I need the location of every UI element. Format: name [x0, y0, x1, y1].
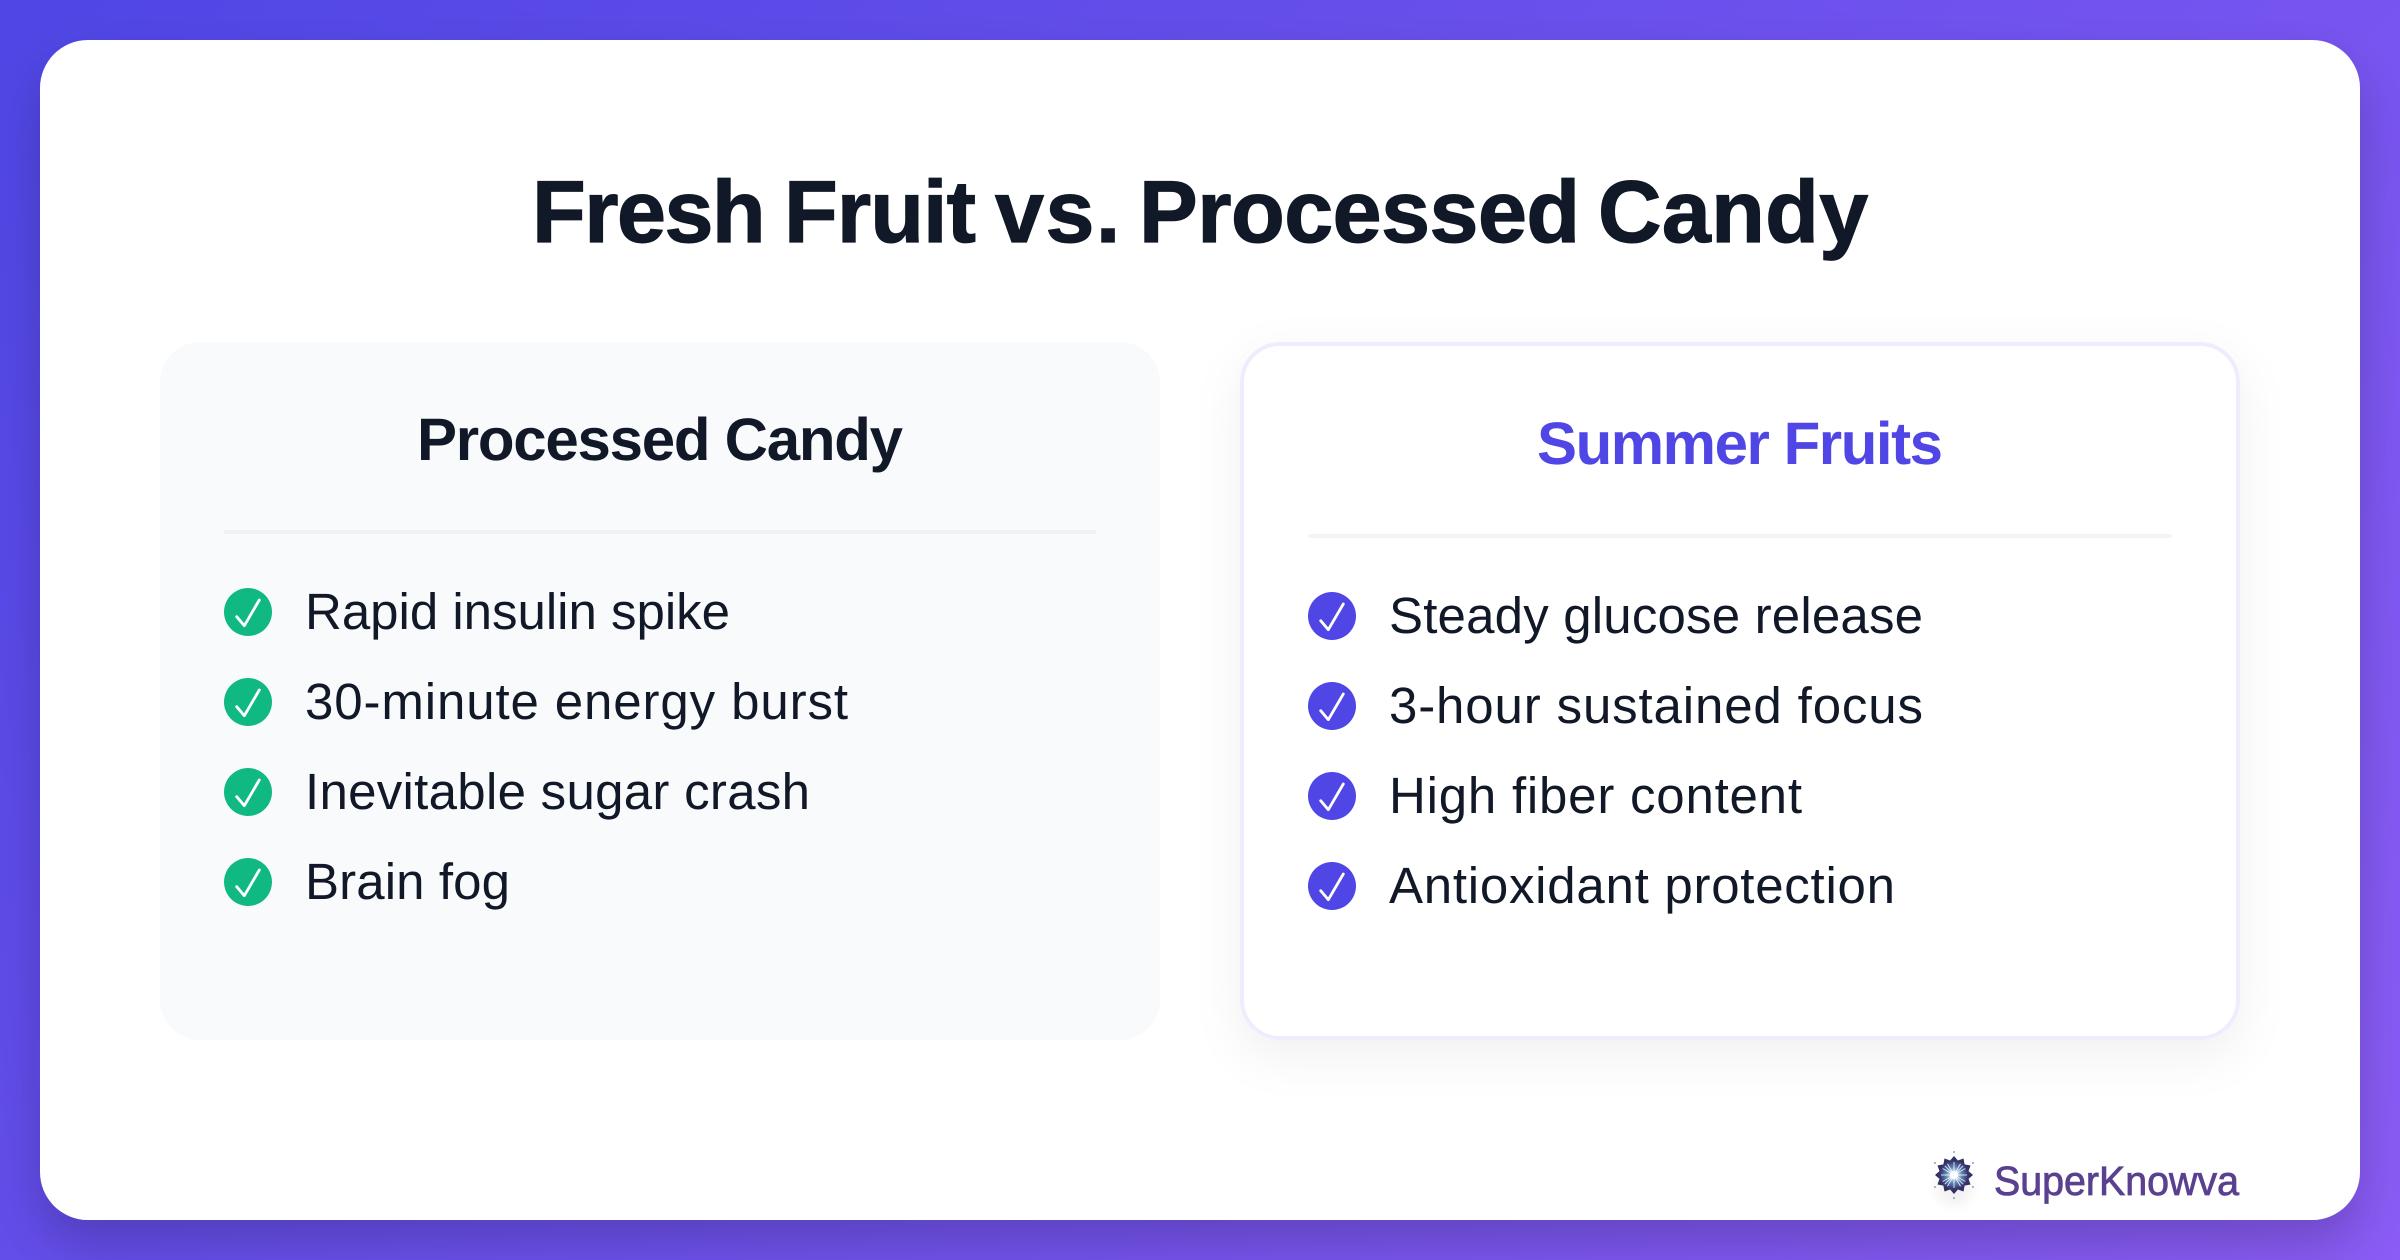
heading: summer fruits: Summer Fruits: [1537, 410, 1943, 477]
title: Candy: [1598, 162, 1868, 261]
title: Fruit: [784, 162, 976, 261]
icon: starburst: [1934, 1151, 1974, 1206]
logo: SuperKnowva: [1934, 1151, 2239, 1206]
panel: processed candy: [160, 342, 1160, 1040]
list item: steady glucose release: Steady glucose release: [1389, 587, 1923, 644]
list item: 3-hour sustained focus: 3-hour sustained focus: [1389, 677, 1923, 734]
wordmark: SuperKnowva: [1994, 1158, 2239, 1204]
title: vs.: [995, 162, 1122, 261]
list item: rapid insulin spike: Rapid insulin spike: [305, 583, 730, 640]
list item: high fiber content: High fiber content: [1389, 767, 1802, 824]
list item: inevitable sugar crash: Inevitable sugar crash: [305, 763, 810, 820]
list item: antioxidant protection: Antioxidant protection: [1389, 857, 1895, 914]
title: Processed: [1139, 162, 1580, 261]
list item: 30-minute energy burst: 30-minute energy burst: [305, 673, 848, 730]
panel: summer fruits: [1242, 344, 2238, 1038]
list item: brain fog: Brain fog: [305, 853, 510, 910]
heading: processed candy: Processed Candy: [417, 406, 904, 473]
title: Fresh: [532, 162, 764, 261]
